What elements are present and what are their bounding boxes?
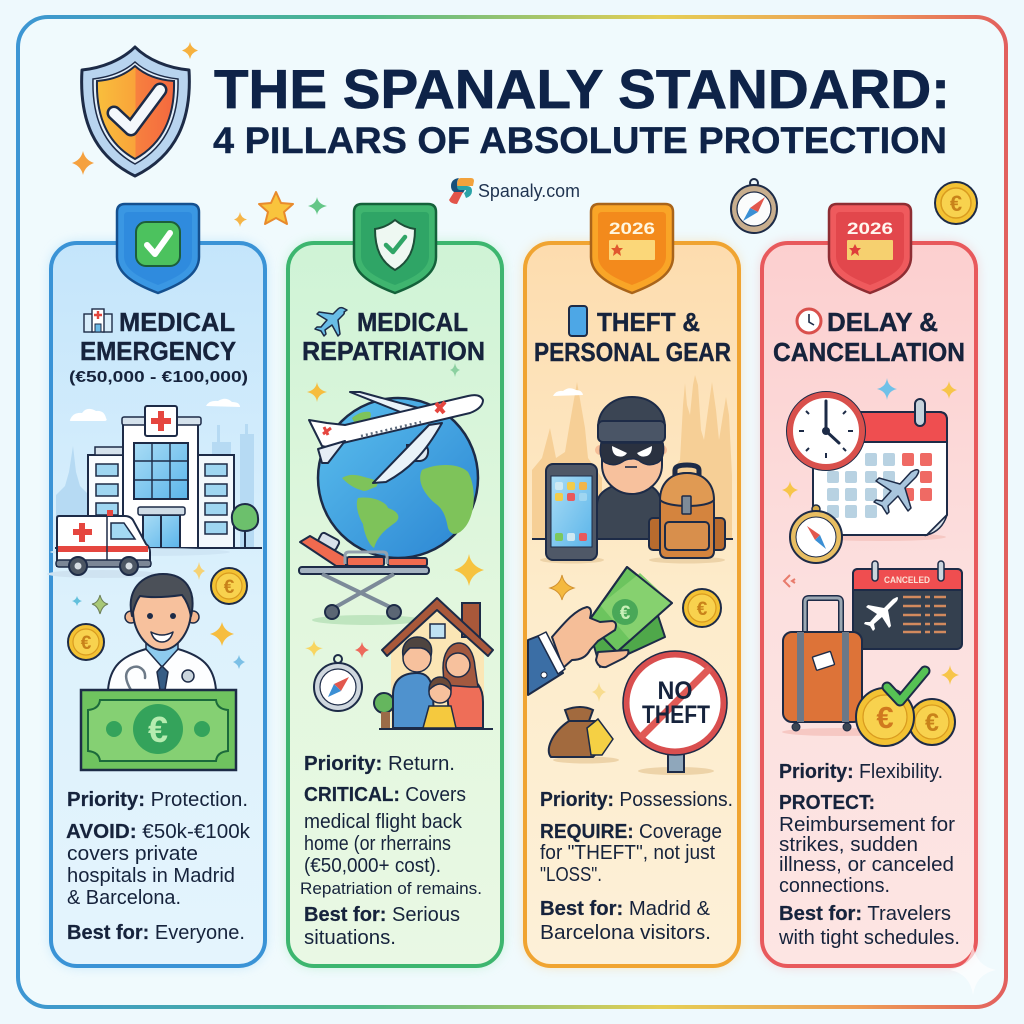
illustration: suitcase — [782, 598, 898, 736]
text block: theft details: "LOSS". — [540, 864, 602, 886]
illustration: no theft sign: THEFT — [642, 701, 710, 729]
text block: delay details: strikes, sudden — [779, 834, 918, 856]
illustration: masked thief — [532, 397, 733, 539]
text block: delay details: Best for: Travelers — [779, 903, 951, 925]
badge: green check shield — [117, 204, 199, 293]
illustration: calendar with plane — [813, 399, 947, 541]
text block: delay details: Priority: Flexibility. — [779, 761, 943, 783]
text block: repatriation details: medical flight back — [304, 811, 463, 833]
text block: theft details: REQUIRE: Coverage — [540, 821, 722, 843]
illustration: airplane — [309, 392, 483, 483]
icon: euro coin top — [935, 182, 977, 224]
illustration: euro banknote: € — [148, 709, 168, 750]
illustration: smartphone — [540, 464, 604, 564]
icon: main shield with check — [82, 47, 189, 176]
decorative star cluster — [234, 192, 327, 227]
text block: medical emergency details — [66, 789, 251, 944]
illustration: euro coins with check: € — [876, 700, 894, 735]
illustration: backpack — [649, 465, 725, 564]
panel 1: medical emergency — [47, 204, 265, 966]
badge: green shield — [354, 204, 436, 293]
badge: red 2026 — [829, 204, 911, 293]
title: 4 PILLARS OF ABSOLUTE PROTECTION — [213, 120, 947, 161]
text block: medical emergency details: covers private — [67, 843, 198, 865]
illustration: no theft sign — [623, 651, 727, 775]
icon: small plane — [315, 308, 347, 336]
icon: sparkle top of shield — [182, 42, 198, 59]
illustration: euro coins with check — [856, 671, 955, 746]
text block: repatriation details — [300, 753, 482, 949]
heading: medical repatriation: REPATRIATION — [302, 336, 485, 366]
icon: euro coin right — [211, 568, 247, 604]
panel 3: theft and personal gear — [525, 204, 739, 966]
heading: medical emergency: (€50,000 - €100,000) — [69, 369, 248, 386]
text block: repatriation details: Best for: Serious — [304, 904, 460, 926]
heading: medical emergency: MEDICAL — [119, 307, 235, 337]
text block: delay details: with tight schedules. — [778, 927, 960, 949]
text block: medical emergency details: AVOID: €50k-€100k — [66, 821, 251, 843]
heading: medical repatriation: MEDICAL — [357, 307, 468, 337]
sparkle — [592, 682, 606, 702]
icon: small clock — [797, 309, 821, 333]
sparkle — [550, 575, 574, 600]
icon: euro coin: € — [697, 599, 708, 620]
sparkles — [305, 363, 484, 658]
illustration: wall clock — [787, 392, 865, 470]
text block: theft details: Priority: Possessions. — [540, 789, 733, 811]
text block: theft details — [540, 789, 733, 944]
text block: delay details: PROTECT: — [779, 792, 875, 814]
title: THE SPANALY STANDARD: — [214, 58, 950, 120]
text block: medical emergency details: hospitals in Madrid — [67, 865, 235, 887]
icon: euro coin top: € — [950, 191, 962, 216]
text block: delay details: illness, or canceled — [779, 854, 954, 876]
text block: medical emergency details: & Barcelona. — [67, 887, 181, 909]
icon: compass top — [731, 179, 777, 233]
illustration: ambulance — [47, 510, 157, 578]
heading: medical repatriation — [302, 307, 485, 366]
title — [213, 58, 950, 161]
illustration: canceled flight board: CANCELED — [884, 575, 930, 585]
heading: delay and cancellation — [773, 307, 965, 367]
sparkles — [782, 378, 959, 685]
text block: medical emergency details: Priority: Protection. — [67, 789, 248, 811]
illustration: canceled flight board — [853, 561, 962, 649]
heading: theft and personal gear: PERSONAL GEAR — [534, 337, 731, 367]
badge: red 2026: 2026 — [847, 219, 893, 238]
icon: hospital small — [84, 309, 112, 332]
corner sparkle watermark — [950, 945, 996, 995]
icon: euro coin right: € — [224, 577, 235, 598]
heading: medical emergency: EMERGENCY — [80, 336, 236, 366]
icon: euro coin left — [68, 624, 104, 660]
panel 4: delay and cancellation — [762, 204, 976, 966]
icon: euro coin left: € — [81, 633, 92, 654]
text block: repatriation details: home (or rherrains — [304, 833, 451, 855]
illustration: euro coins with check: € — [925, 709, 939, 737]
text block: medical emergency details: Best for: Everyone. — [67, 922, 245, 944]
text block: delay details — [778, 761, 960, 949]
illustration: globe — [318, 398, 478, 558]
illustration: smiling doctor — [108, 574, 216, 690]
text block: repatriation details: CRITICAL: Covers — [304, 784, 466, 806]
illustration: euro banknote — [81, 690, 236, 770]
text block: theft details: Barcelona visitors. — [540, 922, 711, 944]
badge: orange 2026: 2026 — [609, 219, 655, 238]
heading: delay and cancellation: DELAY & — [827, 307, 938, 337]
heading: theft and personal gear: THEFT & — [597, 307, 700, 337]
text block: delay details: connections. — [779, 875, 890, 897]
illustration: no theft sign: NO — [658, 677, 692, 705]
text block: theft details: for "THEFT", not just — [540, 842, 715, 864]
illustration: hand holding cash: € — [620, 603, 631, 624]
logo: Spanaly.com — [449, 178, 580, 204]
badge: orange 2026 — [591, 204, 673, 293]
icon: compass — [314, 655, 362, 711]
logo: Spanaly.com: Spanaly.com — [478, 181, 580, 201]
icon: pocket compass — [790, 505, 842, 563]
icon: phone small — [569, 306, 587, 336]
illustration: family at home — [374, 598, 493, 729]
text block: repatriation details: Priority: Return. — [304, 753, 455, 775]
heading: medical emergency — [69, 307, 248, 386]
panel 2: medical repatriation — [288, 204, 502, 966]
illustration: stretcher — [299, 532, 429, 625]
icon: euro coin — [683, 589, 721, 627]
illustration: money bag — [549, 707, 619, 764]
illustration: hand holding cash — [528, 567, 672, 695]
heading: delay and cancellation: CANCELLATION — [773, 337, 965, 367]
text block: delay details: Reimbursement for — [779, 814, 955, 836]
illustration: hospital — [50, 406, 262, 556]
text block: repatriation details: situations. — [304, 927, 396, 949]
text block: theft details: Best for: Madrid & — [540, 898, 711, 920]
illustration: city skyline — [56, 399, 254, 548]
text block: repatriation details: (€50,000+ cost). — [304, 855, 441, 877]
heading: theft and personal gear — [534, 307, 731, 367]
sparkles — [72, 562, 245, 669]
text block: repatriation details: Repatriation of remains. — [300, 879, 482, 898]
illustration: city silhouette — [532, 375, 732, 539]
icon: sparkle left of shield — [72, 151, 94, 175]
